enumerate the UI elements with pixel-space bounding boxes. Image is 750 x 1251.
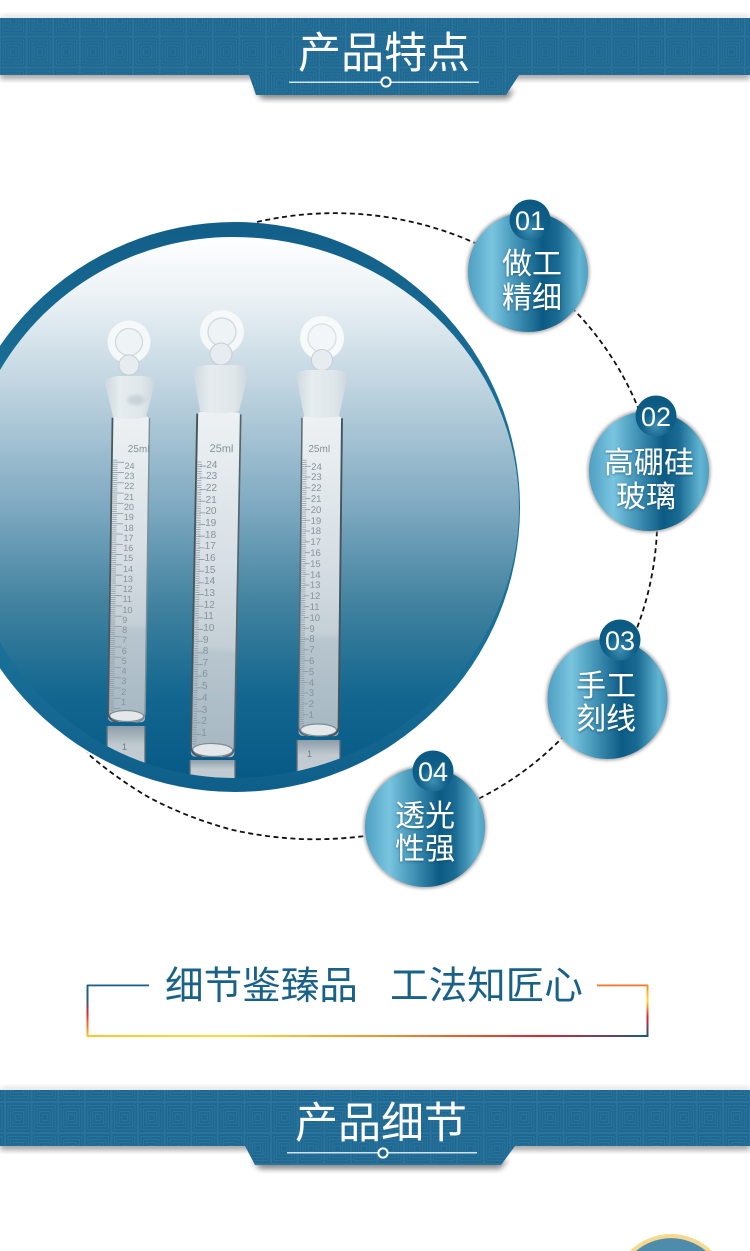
test tube: left: 13 (123, 574, 133, 584)
test tube: right: 24 (311, 462, 322, 473)
test tube: right: 1 (308, 710, 314, 721)
test tube: right: 9 (309, 624, 315, 635)
test tube: middle: 2 (201, 716, 208, 727)
slogan: 细节鉴臻品 (165, 955, 358, 1011)
heading: 产品细节: 产品细节 (295, 1089, 467, 1151)
test tube: left: 10 (122, 605, 132, 615)
test tube: right: 4 (309, 678, 314, 689)
test tube: left: 11 (122, 594, 132, 604)
test tube: right: 2 (309, 699, 314, 710)
test tube: left: 16 (123, 543, 133, 553)
feature bubble 02 (588, 396, 710, 532)
dashed orbit line (87, 213, 657, 839)
number badge 03 (600, 620, 640, 660)
test tube reflections (106, 726, 341, 778)
test tube reflections: 1 (122, 742, 127, 752)
outer ring (0, 222, 520, 792)
test tube: left: 17 (123, 533, 134, 543)
test tube: right: 25ml (308, 444, 330, 455)
gradient frame (86, 984, 648, 1037)
test tube: left: 7 (122, 635, 127, 645)
label: 透光性强: 性强 (395, 824, 455, 868)
test tube: left: 21 (124, 492, 134, 502)
test tube: middle: 19 (205, 518, 217, 529)
test tube: right: 15 (310, 559, 321, 570)
test tube: right: 3 (309, 688, 314, 699)
test tube: right: 14 (310, 570, 321, 581)
test tube: left (105, 320, 155, 722)
test tube: left: 19 (124, 512, 134, 522)
test tube: middle: 15 (204, 565, 216, 576)
test tube: middle: 25ml (209, 443, 234, 455)
test tube: middle: 18 (205, 530, 217, 541)
test tube: middle: 20 (205, 506, 217, 517)
test tube: middle: 1 (201, 728, 207, 739)
label: 做工精细: 精细 (502, 273, 562, 317)
test tube: middle: 10 (203, 623, 215, 634)
label: 透光性强: 透光 (395, 791, 455, 835)
test tube: left: 12 (123, 584, 133, 594)
feature bubble 03 (546, 620, 669, 760)
test tube: right: 20 (311, 505, 321, 516)
test tube: left: 1 (121, 697, 126, 707)
label: 手工刻线: 手工 (576, 661, 636, 705)
test tube: right: 18 (310, 526, 321, 537)
test tube: left: 20 (124, 502, 134, 512)
label: 高硼硅玻璃: 玻璃 (616, 472, 676, 516)
test tube: left: 8 (122, 625, 127, 635)
test tube: right: 7 (309, 645, 315, 656)
test tube: right: 23 (311, 472, 322, 483)
test tube: right: 6 (309, 656, 314, 667)
test tube: right: 12 (310, 591, 320, 602)
test tube: right: 17 (310, 537, 321, 548)
test tube: right: 16 (310, 548, 321, 559)
test tube: middle: 13 (204, 588, 216, 599)
number badge 03: 03 (605, 626, 635, 656)
test tube: right: 8 (309, 634, 315, 645)
feature bubble 04 (364, 750, 486, 888)
test tube: right (296, 316, 348, 736)
heading: 产品特点: 产品特点 (298, 19, 470, 81)
test tube: left: 5 (122, 656, 127, 666)
slogan: 工法知匠心 (390, 955, 583, 1011)
inner gradient disc (0, 237, 519, 778)
test tube: middle: 6 (202, 669, 208, 680)
test tube: middle (191, 310, 249, 757)
label: 做工精细: 做工 (502, 239, 562, 283)
test tube: middle: 16 (204, 553, 216, 564)
test tube: left: 18 (124, 523, 134, 533)
test tube: middle: 5 (202, 681, 208, 692)
label: 高硼硅玻璃: 高硼硅 (604, 438, 694, 482)
heading underline with ring (287, 1148, 477, 1158)
banner: product details (0, 1087, 750, 1169)
test tube: left: 22 (124, 481, 134, 491)
test tube: left: 2 (121, 687, 126, 697)
number badge 01: 01 (515, 206, 545, 236)
test tube: right: 11 (310, 602, 320, 613)
test tube: middle: 11 (203, 611, 214, 622)
test tube: left: 3 (121, 676, 126, 686)
banner: product features (0, 15, 750, 99)
partial detail circle (630, 1234, 712, 1251)
test tube: right: 10 (309, 613, 320, 624)
test tube: left: 4 (121, 666, 127, 676)
test tube: left: 25ml (128, 444, 150, 455)
heading underline with ring (289, 77, 479, 87)
test tube: middle: 14 (204, 576, 216, 587)
test tube: middle: 17 (205, 541, 216, 552)
test tube: left: 23 (124, 471, 134, 481)
test tube: right: 5 (309, 667, 314, 678)
test tube: middle: 3 (202, 705, 208, 716)
test tube: middle: 9 (203, 635, 209, 646)
test tube: left: 24 (124, 461, 135, 471)
test tube: left: 9 (122, 615, 127, 625)
label: 手工刻线: 刻线 (576, 694, 636, 738)
product circle with test tubes (0, 222, 520, 792)
number badge 02: 02 (641, 402, 671, 432)
test tube: left: 6 (122, 646, 127, 656)
test tube: right: 22 (311, 483, 322, 494)
test tube: middle: 22 (206, 483, 217, 494)
test tube: right: 19 (311, 516, 321, 527)
test tube: middle: 21 (205, 495, 217, 506)
test tube: middle: 4 (202, 693, 208, 704)
test tube: middle: 8 (203, 646, 209, 657)
test tube: middle: 23 (206, 471, 218, 482)
test tube: right: 21 (311, 494, 321, 505)
test tube reflections: 1 (307, 749, 312, 759)
test tube: middle: 7 (202, 658, 209, 669)
test tube: right: 13 (310, 580, 321, 591)
number badge 04: 04 (418, 757, 448, 787)
feature bubble 01 (466, 200, 590, 334)
test tube: middle: 24 (206, 460, 218, 471)
test tube: left: 15 (123, 553, 133, 563)
test tube: middle: 12 (204, 600, 215, 611)
test tube: left: 14 (123, 564, 133, 574)
